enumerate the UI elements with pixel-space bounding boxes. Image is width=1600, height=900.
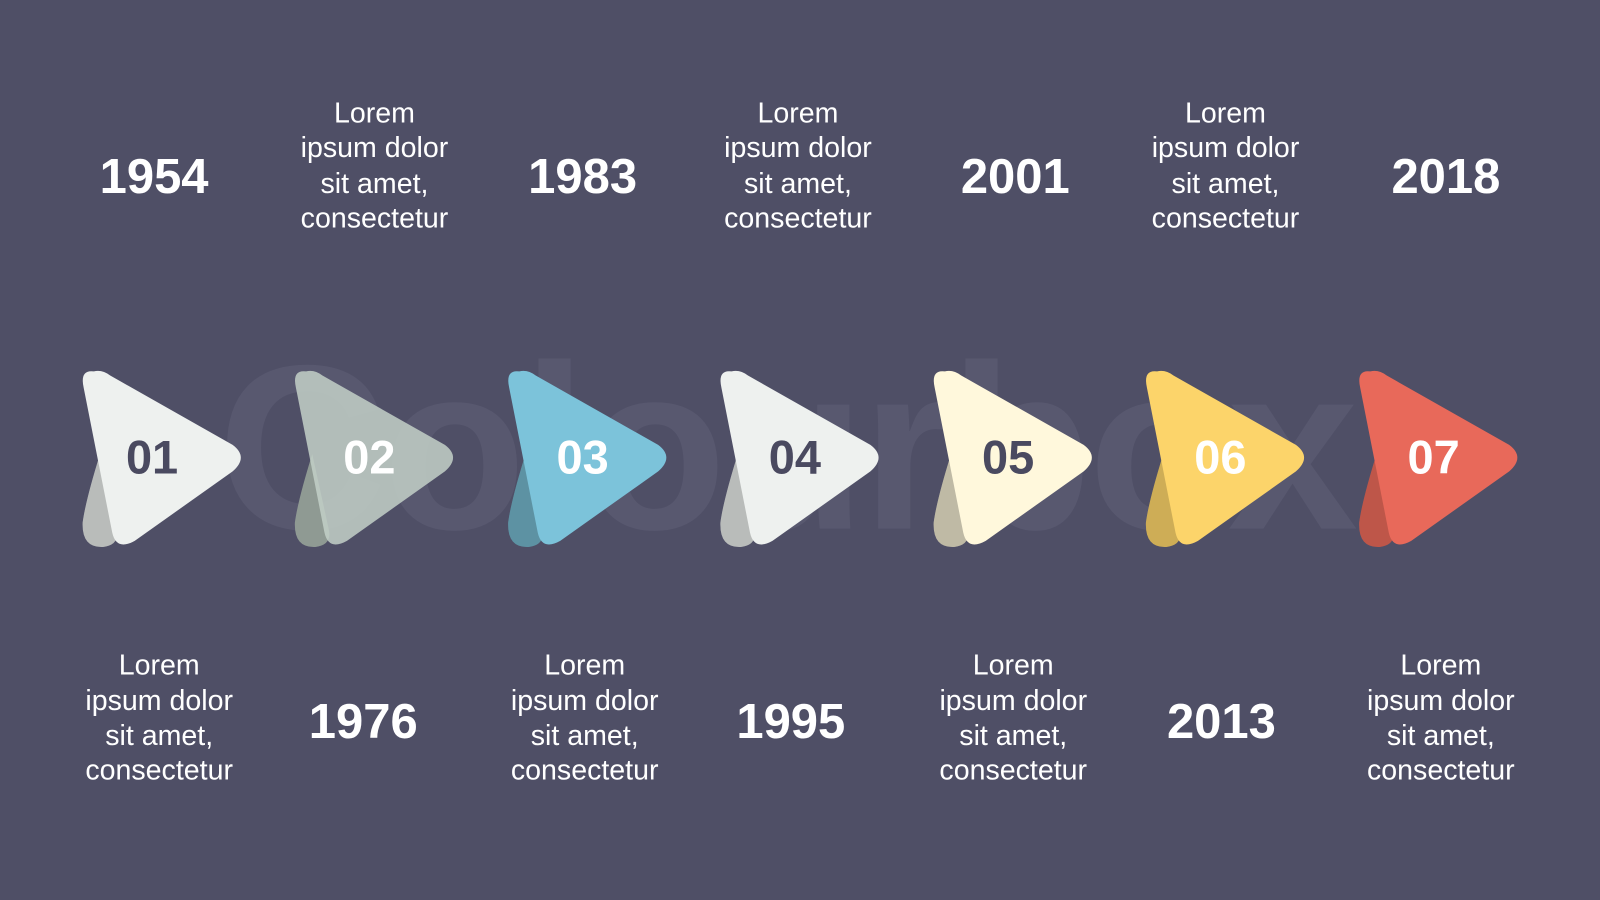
bottom descriptions: Lorem	[1400, 649, 1481, 681]
bottom descriptions: consectetur	[85, 755, 233, 787]
watermark: Colourbox	[217, 317, 1357, 579]
bottom years: 1976	[309, 695, 418, 749]
arrow 06: 06	[1194, 431, 1247, 483]
bottom descriptions: Lorem	[119, 649, 200, 681]
bottom descriptions: Lorem	[973, 649, 1054, 681]
bottom descriptions: ipsum dolor	[939, 685, 1088, 717]
bottom descriptions: ipsum dolor	[511, 685, 659, 717]
top descriptions: sit amet,	[1172, 168, 1279, 200]
top descriptions: consectetur	[724, 203, 872, 235]
arrow 01: 01	[126, 431, 178, 483]
top descriptions: ipsum dolor	[1152, 132, 1300, 164]
top descriptions: Lorem	[757, 97, 838, 129]
bottom descriptions: Lorem	[544, 649, 625, 681]
arrow 04	[720, 371, 879, 547]
top descriptions: ipsum dolor	[301, 132, 449, 164]
bottom descriptions: sit amet,	[1387, 720, 1495, 752]
top years: 1983	[528, 150, 637, 204]
bottom descriptions: consectetur	[511, 755, 659, 787]
bottom descriptions	[85, 649, 1515, 787]
top years: 1954	[100, 150, 209, 204]
bottom descriptions: consectetur	[1367, 755, 1515, 787]
arrow 05	[934, 371, 1092, 547]
bottom descriptions: sit amet,	[105, 720, 213, 752]
top descriptions	[301, 97, 1300, 235]
arrow 07	[1359, 371, 1517, 547]
arrow 06	[1146, 371, 1304, 547]
top years: 2001	[961, 150, 1070, 204]
bottom descriptions: sit amet,	[531, 720, 639, 752]
top years	[100, 150, 1500, 204]
arrow 04: 04	[769, 431, 821, 483]
bottom descriptions: sit amet,	[959, 720, 1067, 752]
top descriptions: consectetur	[1152, 203, 1300, 235]
top descriptions: Lorem	[1185, 97, 1266, 129]
top descriptions: sit amet,	[321, 168, 428, 200]
bottom years	[309, 695, 1276, 749]
top descriptions: ipsum dolor	[724, 132, 872, 164]
top descriptions: sit amet,	[744, 168, 852, 200]
arrow 03: 03	[557, 431, 609, 483]
arrow 07: 07	[1408, 431, 1460, 483]
arrow 02: 02	[343, 431, 395, 483]
arrow 01	[83, 371, 241, 547]
top descriptions: Lorem	[334, 97, 415, 129]
bottom years: 1995	[736, 695, 845, 749]
bottom descriptions: ipsum dolor	[85, 685, 233, 717]
arrow 03	[508, 371, 666, 547]
top years: 2018	[1391, 150, 1500, 204]
arrow 02	[295, 371, 453, 547]
bottom descriptions: ipsum dolor	[1367, 685, 1515, 717]
arrow 05: 05	[982, 431, 1034, 483]
bottom descriptions: consectetur	[939, 755, 1088, 787]
bottom years: 2013	[1167, 695, 1276, 749]
top descriptions: consectetur	[301, 203, 449, 235]
